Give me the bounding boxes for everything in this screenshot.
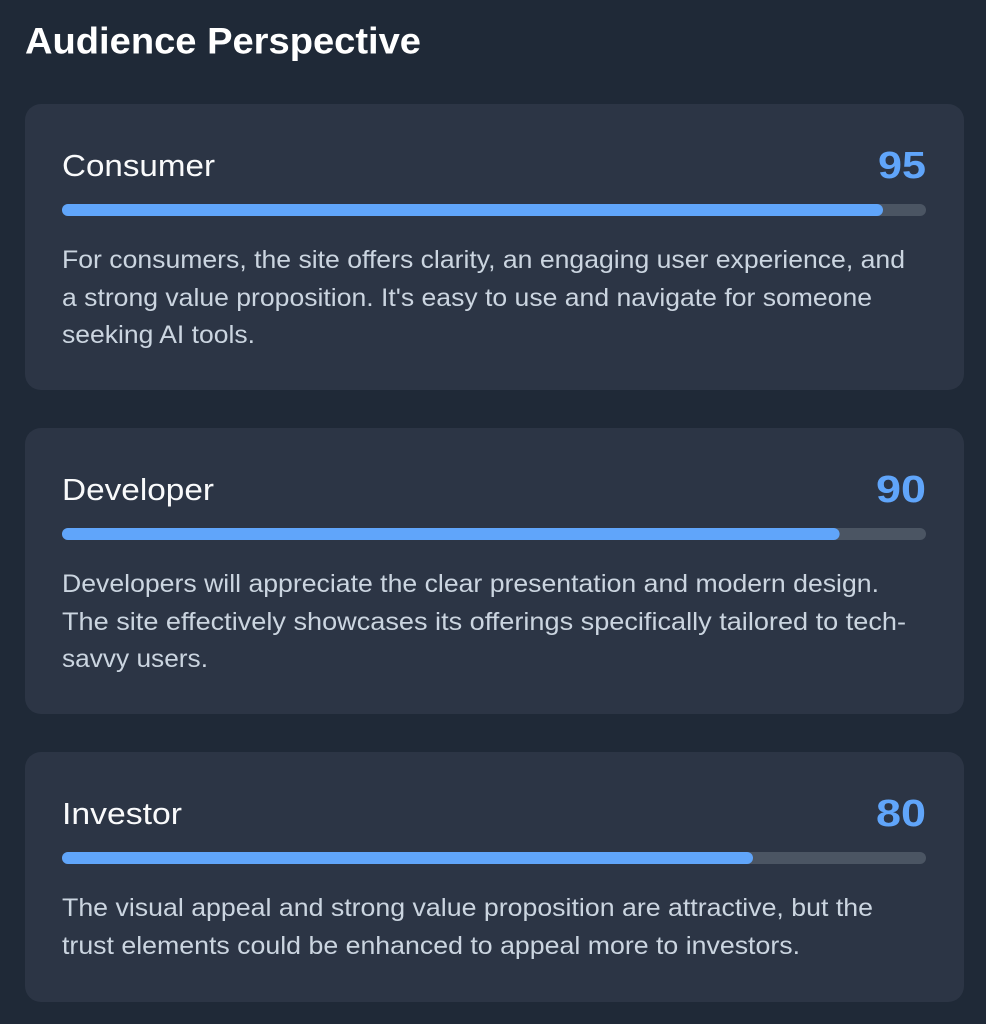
investor description: trust elements could be enhanced to appeal more to investors.	[62, 932, 800, 960]
developer score: 90	[876, 469, 926, 511]
developer progress bar	[62, 528, 926, 540]
developer description: The site effectively showcases its offerings specifically tailored to tech-	[62, 608, 906, 636]
investor description: The visual appeal and strong value proposition are attractive, but the	[62, 894, 873, 922]
consumer description	[62, 246, 905, 349]
panel: investor	[25, 752, 964, 1002]
developer description	[62, 570, 906, 673]
developer description: Developers will appreciate the clear presentation and modern design.	[62, 570, 879, 598]
consumer description: For consumers, the site offers clarity, an engaging user experience, and	[62, 246, 905, 274]
panel: developer	[25, 428, 964, 714]
consumer heading: Consumer	[62, 148, 215, 183]
consumer description: a strong value proposition. It's easy to use and navigate for someone	[62, 284, 872, 312]
investor description	[62, 894, 873, 960]
developer description: savvy users.	[62, 645, 208, 673]
consumer progress bar	[62, 204, 926, 216]
consumer description: seeking AI tools.	[62, 321, 255, 349]
investor progress bar	[62, 852, 926, 864]
consumer score: 95	[878, 145, 926, 187]
panel: consumer	[25, 104, 964, 390]
title: Audience Perspective	[25, 20, 421, 62]
investor score: 80	[876, 793, 926, 835]
developer heading: Developer	[62, 472, 214, 507]
investor heading: Investor	[62, 796, 182, 831]
